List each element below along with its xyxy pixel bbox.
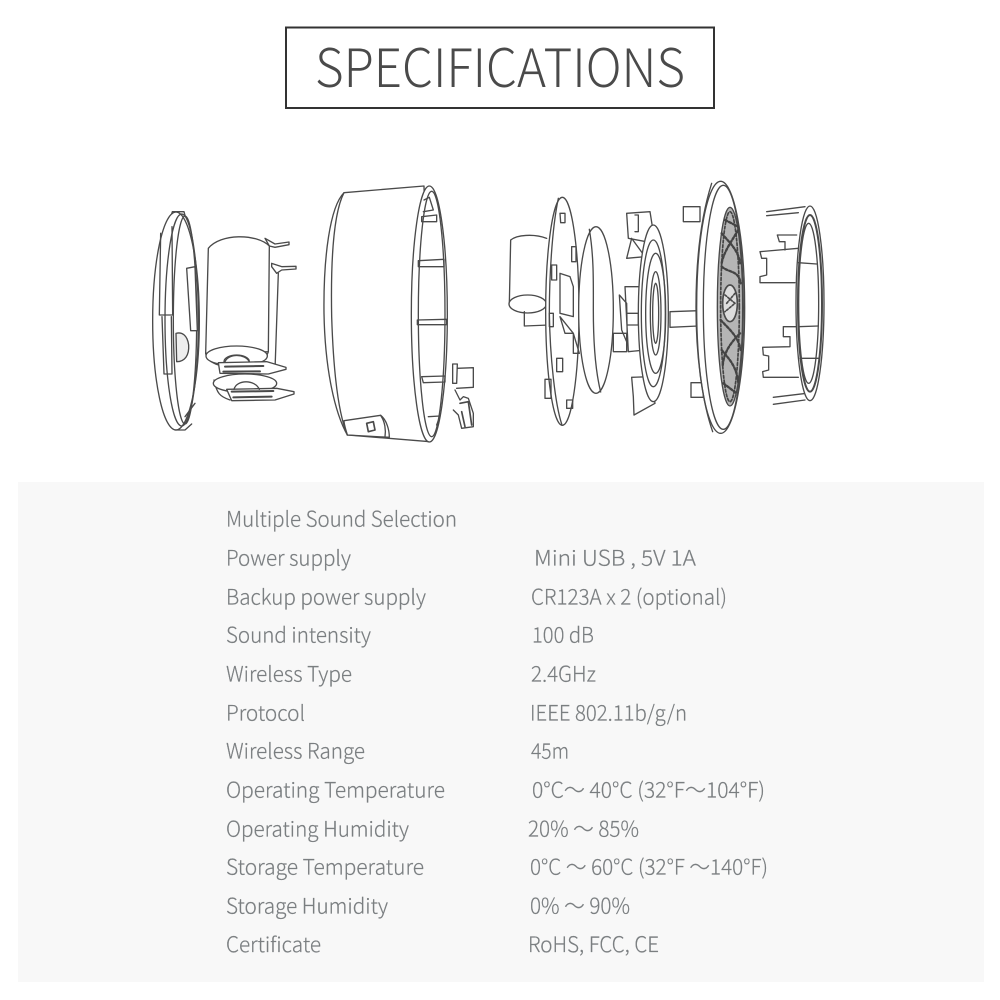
spec labels: Power supply [226, 542, 351, 572]
spec values [528, 542, 768, 959]
spec values: 0% ～ 90% [530, 890, 630, 920]
spec labels: Multiple Sound Selection [226, 504, 457, 534]
icon: battery cylinders [206, 237, 296, 401]
icon: circuit board and usb module [509, 197, 579, 425]
spec labels: Wireless Range [226, 736, 365, 766]
icon: speaker grille ring [696, 181, 745, 433]
specification panel [18, 482, 984, 982]
left parts [153, 186, 473, 442]
spec labels: Storage Humidity [226, 890, 388, 920]
right parts [509, 181, 824, 433]
spec labels: Storage Temperature [226, 852, 424, 882]
title box: SPECIFICATIONS [315, 27, 685, 103]
icon: speaker ring with tabs [613, 212, 668, 415]
exploded product diagram [153, 181, 824, 442]
spec values: Mini USB , 5V 1A [534, 542, 697, 572]
icon: round speaker disc [579, 227, 613, 393]
spec values: 100 dB [532, 620, 594, 650]
icon: front trim ring with teeth [760, 206, 824, 404]
spec labels: Wireless Type [226, 658, 352, 688]
icon: back cover ring [153, 212, 199, 430]
icon: shaft and posts [670, 207, 703, 397]
spec values: 0°C ～ 60°C (32°F ～140°F) [530, 852, 768, 882]
spec labels: Sound intensity [226, 620, 371, 650]
spec values: 2.4GHz [531, 658, 596, 688]
spec labels: Certificate [226, 929, 321, 959]
spec values: 20% ～ 85% [528, 814, 639, 844]
spec labels: Protocol [226, 698, 305, 728]
spec labels: Backup power supply [226, 582, 426, 612]
spec values: RoHS, FCC, CE [528, 929, 659, 959]
spec values: 0°C～ 40°C (32°F～104°F) [532, 774, 765, 804]
spec values: 45m [531, 736, 569, 766]
spec values: IEEE 802.11b/g/n [530, 698, 687, 728]
spec labels [226, 504, 457, 959]
icon: main housing shell [324, 186, 447, 442]
spec labels: Operating Humidity [226, 814, 409, 844]
icon: usb connector [453, 364, 473, 428]
spec values: CR123A x 2 (optional) [531, 582, 727, 612]
spec labels: Operating Temperature [226, 774, 445, 804]
